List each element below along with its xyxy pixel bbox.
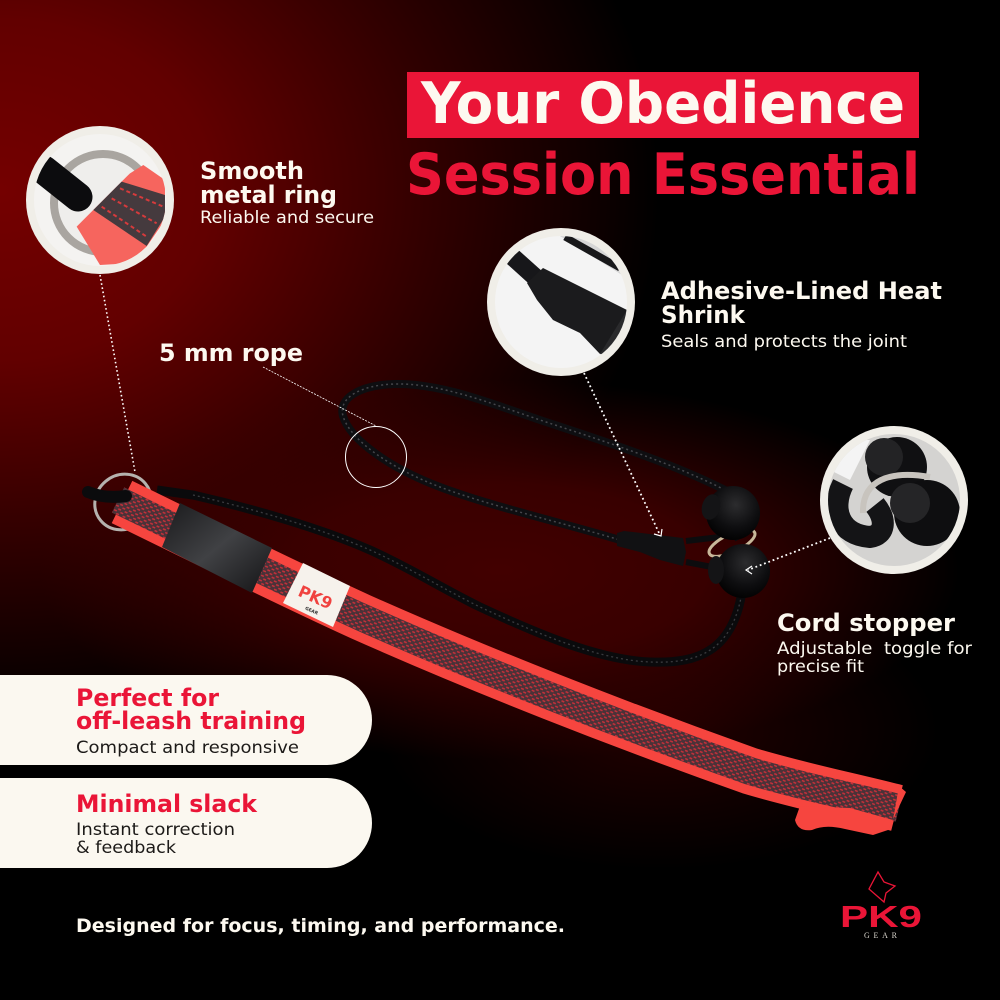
panel: minimal slack: Minimal slack xyxy=(76,790,258,818)
panel: minimal slack: Instant correction xyxy=(76,820,235,840)
small ring between stoppers xyxy=(706,524,758,562)
photo circle: cord stopper xyxy=(820,426,968,574)
rope: upper loop xyxy=(342,384,725,540)
label: cord stopper: precise fit xyxy=(777,657,864,677)
title line 1: Your Obedience xyxy=(420,71,905,137)
icon: dog head xyxy=(869,872,895,902)
brand logo: PK9 xyxy=(840,899,922,934)
label: 5 mm rope: 5 mm rope xyxy=(159,339,303,367)
photo circle: heat shrink xyxy=(487,228,640,376)
heat shrink on rope xyxy=(617,531,686,566)
brand logo: GEAR xyxy=(864,931,898,940)
label: smooth metal ring: metal ring xyxy=(200,181,337,209)
photo circle: metal ring xyxy=(26,126,174,274)
metal ring on leash xyxy=(83,463,163,541)
label: cord stopper xyxy=(777,609,972,677)
panel: off-leash training xyxy=(0,675,372,765)
cord stopper lower xyxy=(708,544,770,598)
panel: off-leash training: Perfect for xyxy=(76,684,219,712)
rope: strap to lower loop xyxy=(157,490,743,662)
strap xyxy=(118,500,899,808)
panel: minimal slack: & feedback xyxy=(76,838,176,858)
panel: off-leash training: Compact and responsive xyxy=(76,738,299,758)
rope highlight circle xyxy=(346,426,406,488)
panel: off-leash training: off-leash training xyxy=(76,707,306,735)
strap logo tag: PK9 xyxy=(295,582,335,613)
rope ends to stoppers xyxy=(686,520,738,567)
title line 2: Session Essential xyxy=(406,142,920,208)
brand logo xyxy=(840,872,922,940)
strap logo tag: GEAR xyxy=(304,606,319,617)
label: smooth metal ring: Reliable and secure xyxy=(200,208,374,228)
heat shrink on strap xyxy=(162,503,272,593)
strap logo tag xyxy=(283,563,350,627)
tagline: Designed for focus, timing, and performance. xyxy=(76,915,565,937)
strap end fold xyxy=(795,786,906,835)
label: heat shrink xyxy=(661,277,942,352)
callout lines xyxy=(100,275,830,574)
panel: minimal slack xyxy=(0,778,372,868)
label: smooth metal ring: Smooth xyxy=(200,157,304,185)
product: leash xyxy=(83,384,906,835)
label: cord stopper: Cord stopper xyxy=(777,609,955,637)
label: cord stopper: Adjustable toggle for xyxy=(777,639,972,659)
label: heat shrink: Shrink xyxy=(661,301,746,329)
label: heat shrink: Adhesive-Lined Heat xyxy=(661,277,942,305)
title highlight box xyxy=(407,72,919,138)
title xyxy=(406,71,920,208)
label: heat shrink: Seals and protects the joint xyxy=(661,332,907,352)
cord stopper upper xyxy=(699,486,760,540)
rope loop at strap end xyxy=(88,492,126,497)
label: smooth metal ring xyxy=(200,157,374,228)
